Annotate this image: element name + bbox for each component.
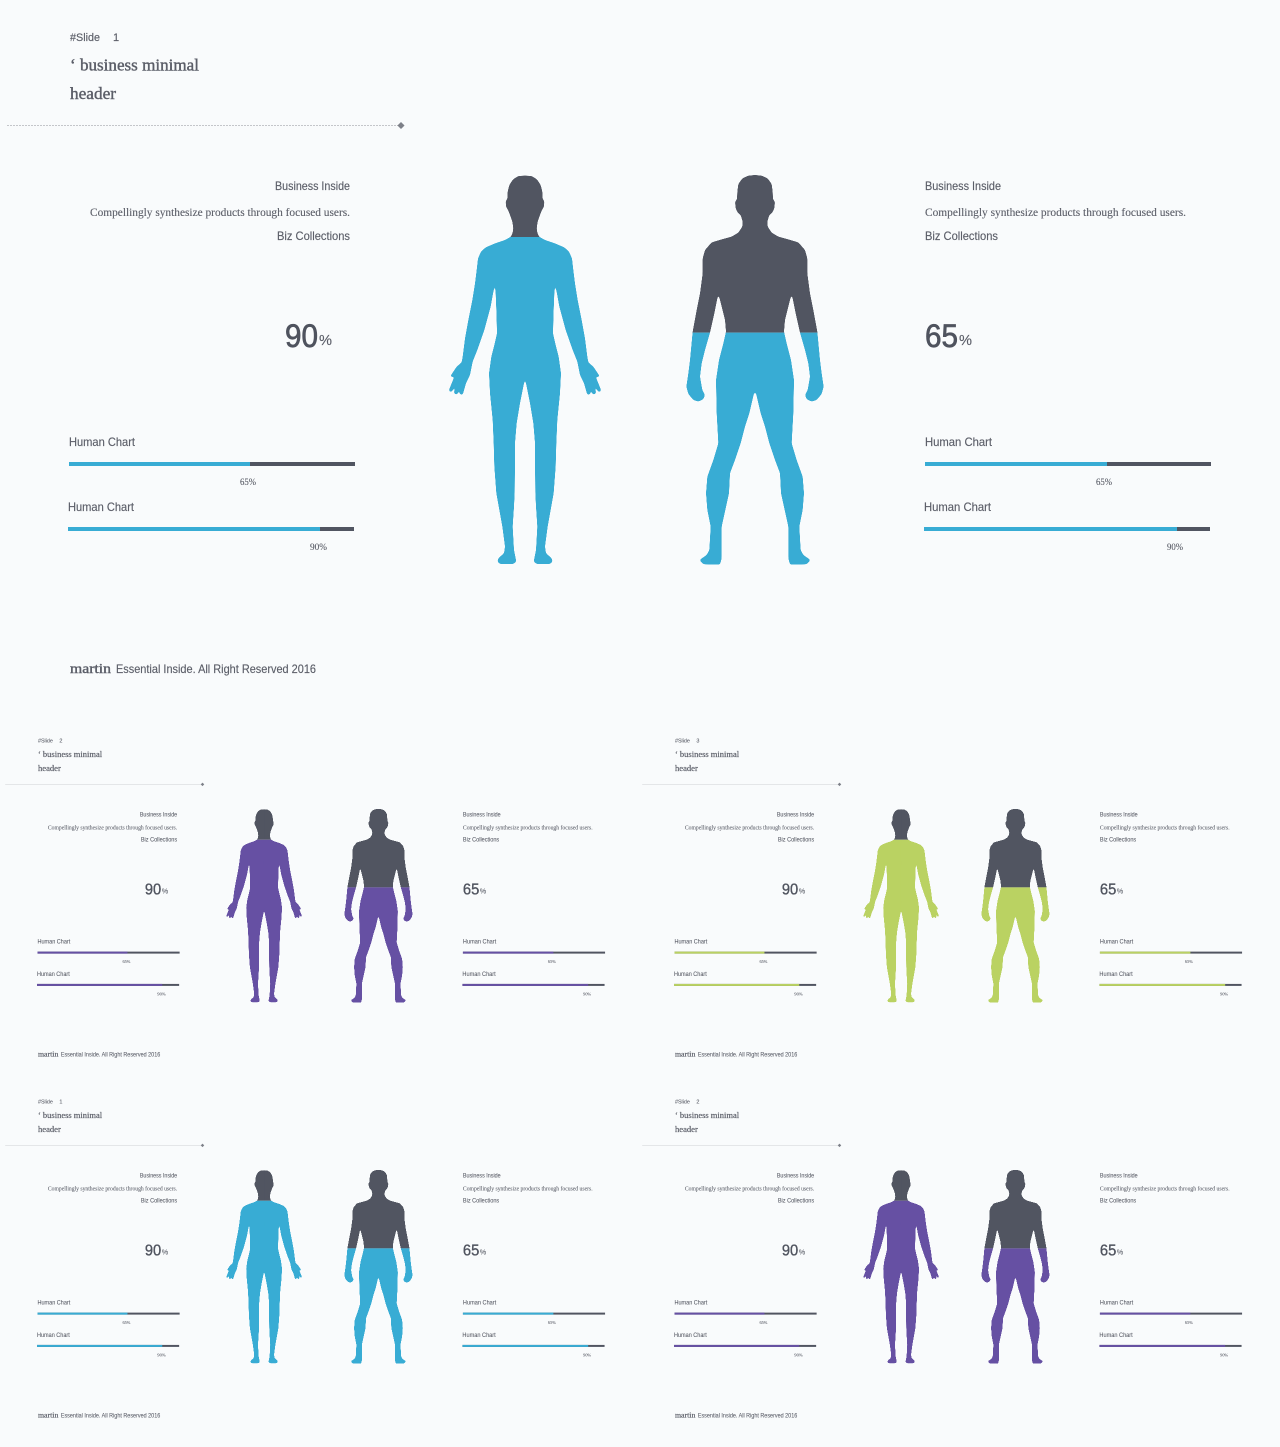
right bar chart: Human Chart (1100, 940, 1134, 946)
left bar chart: Human Chart (37, 1301, 71, 1307)
left bar chart: 90% (310, 542, 328, 552)
right bar chart (1099, 1301, 1242, 1357)
right percentage: % (480, 886, 487, 895)
right percentage: 65 (1100, 881, 1116, 898)
right text block: Biz Collections (925, 229, 998, 243)
heading: 2 (59, 738, 62, 744)
left percentage: % (162, 886, 169, 895)
left text block: Biz Collections (141, 1198, 177, 1204)
right bar chart: Human Chart (462, 1333, 496, 1339)
left bar chart: Human Chart (69, 435, 136, 449)
right percentage: % (1117, 886, 1124, 895)
right bar chart: 65% (1185, 959, 1193, 964)
left percentage: 90 (285, 318, 318, 354)
right percentage: 65 (925, 318, 958, 354)
heading: 2 (696, 1099, 699, 1105)
left text block (48, 812, 178, 843)
left bar chart: Human Chart (674, 1333, 707, 1339)
heading (38, 1099, 103, 1134)
left bar chart (68, 435, 355, 552)
right text block: Business Inside (925, 179, 1001, 193)
panel: slide 1 small blue (5, 1099, 605, 1419)
panel: slide 2 small purple (642, 1099, 1242, 1419)
female figure (226, 809, 302, 1002)
right text block: Biz Collections (463, 837, 499, 843)
left text block: Biz Collections (141, 837, 177, 843)
left text block: Business Inside (275, 179, 350, 193)
male figure (981, 1170, 1050, 1364)
male figure (981, 809, 1050, 1003)
left text block: Biz Collections (778, 1198, 814, 1204)
right text block: Compellingly synthesize products through focused users. (1100, 824, 1230, 831)
footer (38, 1411, 161, 1419)
left text block: Business Inside (140, 1173, 178, 1179)
left bar chart: 65% (122, 959, 131, 964)
heading: header (38, 1124, 61, 1134)
left bar chart: 90% (794, 1352, 803, 1357)
left bar chart (674, 1301, 817, 1357)
footer: Essential Inside. All Right Reserved 2016 (698, 1413, 798, 1419)
male figure (344, 1170, 413, 1364)
right text block: Biz Collections (1100, 837, 1136, 843)
right bar chart: 65% (1096, 477, 1112, 487)
heading: #Slide (38, 738, 53, 744)
left percentage: 90 (782, 881, 798, 898)
heading: header (675, 1124, 698, 1134)
right text block: Compellingly synthesize products through focused users. (1100, 1185, 1230, 1192)
heading: ‘ business minimal (675, 749, 740, 759)
left bar chart (674, 940, 817, 996)
footer: Essential Inside. All Right Reserved 2016 (61, 1413, 161, 1419)
left bar chart: Human Chart (674, 972, 707, 978)
left percentage: % (799, 886, 806, 895)
right text block: Biz Collections (463, 1198, 499, 1204)
left text block (685, 812, 815, 843)
left bar chart: 65% (122, 1320, 131, 1325)
female figure (863, 809, 939, 1002)
footer: Essential Inside. All Right Reserved 2016 (698, 1052, 798, 1058)
left bar chart: Human Chart (674, 1301, 708, 1307)
male figure (686, 175, 824, 565)
left text block: Compellingly synthesize products through focused users. (685, 1185, 815, 1192)
right bar chart: Human Chart (1099, 972, 1133, 978)
panel: slide 2 purple (5, 738, 605, 1058)
right text block: Compellingly synthesize products through focused users. (463, 824, 593, 831)
left text block: Business Inside (777, 812, 815, 818)
right bar chart: Human Chart (924, 500, 992, 514)
left percentage: % (799, 1247, 806, 1256)
footer (38, 1050, 161, 1058)
left text block: Compellingly synthesize products through focused users. (48, 1185, 178, 1192)
female figure (226, 1170, 302, 1363)
left percentage: % (162, 1247, 169, 1256)
right bar chart: Human Chart (463, 940, 497, 946)
right bar chart: Human Chart (463, 1301, 497, 1307)
right text block: Biz Collections (1100, 1198, 1136, 1204)
heading: ‘ business minimal (38, 749, 103, 759)
heading: ‘ business minimal (675, 1110, 740, 1120)
heading (38, 738, 103, 773)
female figure (449, 176, 601, 564)
left bar chart: Human Chart (37, 972, 70, 978)
left text block (48, 1173, 178, 1204)
heading: header (38, 763, 61, 773)
left percentage: 90 (782, 1242, 798, 1259)
heading: ‘ business minimal (38, 1110, 103, 1120)
left bar chart: Human Chart (68, 500, 135, 514)
left bar chart (37, 940, 180, 996)
footer: Essential Inside. All Right Reserved 2016 (61, 1052, 161, 1058)
left bar chart: Human Chart (37, 1333, 70, 1339)
left bar chart: 90% (794, 991, 803, 996)
heading (675, 1099, 740, 1134)
right text block (925, 179, 1186, 243)
panel: slide 3 green (642, 738, 1242, 1058)
left percentage: 90 (145, 1242, 161, 1259)
right bar chart: 90% (583, 991, 591, 996)
right bar chart (1099, 940, 1242, 996)
footer: martin (675, 1050, 696, 1058)
right bar chart: Human Chart (925, 435, 993, 449)
left text block: Business Inside (140, 812, 178, 818)
right text block (463, 1173, 593, 1204)
left text block (685, 1173, 815, 1204)
heading: #Slide (675, 738, 690, 744)
heading (70, 32, 199, 103)
heading: header (675, 763, 698, 773)
right percentage: 65 (1100, 1242, 1116, 1259)
right text block: Compellingly synthesize products through focused users. (463, 1185, 593, 1192)
left text block (90, 179, 350, 243)
right bar chart: Human Chart (462, 972, 496, 978)
footer: Essential Inside. All Right Reserved 2016 (116, 662, 316, 676)
left bar chart: 65% (759, 959, 768, 964)
right bar chart (924, 435, 1211, 552)
left percentage: 90 (145, 881, 161, 898)
left bar chart: Human Chart (674, 940, 708, 946)
left bar chart: 65% (759, 1320, 768, 1325)
left text block: Business Inside (777, 1173, 815, 1179)
left text block: Compellingly synthesize products through focused users. (90, 205, 350, 219)
right text block: Business Inside (1100, 812, 1138, 818)
heading: header (70, 84, 116, 103)
heading: 1 (59, 1099, 62, 1105)
heading (675, 738, 740, 773)
footer: martin (675, 1411, 696, 1419)
left text block: Biz Collections (277, 229, 350, 243)
heading: #Slide (70, 32, 100, 44)
right bar chart: Human Chart (1099, 1333, 1133, 1339)
right percentage: % (1117, 1247, 1124, 1256)
heading: #Slide (38, 1099, 53, 1105)
footer (675, 1050, 798, 1058)
right bar chart: 65% (1185, 1320, 1193, 1325)
right text block: Compellingly synthesize products through focused users. (925, 205, 1186, 219)
heading: #Slide (675, 1099, 690, 1105)
right text block (1100, 812, 1230, 843)
panel: slide 1 large (7, 32, 1211, 677)
right bar chart: 65% (548, 1320, 556, 1325)
right bar chart: 90% (1220, 1352, 1228, 1357)
right percentage: % (480, 1247, 487, 1256)
right text block: Business Inside (463, 1173, 501, 1179)
right bar chart: 90% (583, 1352, 591, 1357)
left text block: Biz Collections (778, 837, 814, 843)
heading: 3 (696, 738, 699, 744)
right bar chart (462, 1301, 605, 1357)
heading: 1 (113, 32, 119, 44)
left bar chart: Human Chart (37, 940, 71, 946)
right bar chart: Human Chart (1100, 1301, 1134, 1307)
left bar chart: 90% (157, 991, 166, 996)
right text block: Business Inside (1100, 1173, 1138, 1179)
left bar chart: 65% (240, 477, 256, 487)
left text block: Compellingly synthesize products through focused users. (685, 824, 815, 831)
right bar chart: 65% (548, 959, 556, 964)
left bar chart: 90% (157, 1352, 166, 1357)
footer: martin (38, 1411, 59, 1419)
right percentage: % (959, 332, 972, 349)
right percentage: 65 (463, 881, 479, 898)
left bar chart (37, 1301, 180, 1357)
footer: martin (70, 662, 111, 677)
right percentage: 65 (463, 1242, 479, 1259)
right text block (1100, 1173, 1230, 1204)
left percentage: % (319, 332, 332, 349)
right text block (463, 812, 593, 843)
right bar chart (462, 940, 605, 996)
male figure (344, 809, 413, 1003)
right bar chart: 90% (1167, 542, 1183, 552)
right text block: Business Inside (463, 812, 501, 818)
heading: ‘ business minimal (70, 56, 199, 74)
footer: martin (38, 1050, 59, 1058)
female figure (863, 1170, 939, 1363)
right bar chart: 90% (1220, 991, 1228, 996)
left text block: Compellingly synthesize products through focused users. (48, 824, 178, 831)
footer (675, 1411, 798, 1419)
